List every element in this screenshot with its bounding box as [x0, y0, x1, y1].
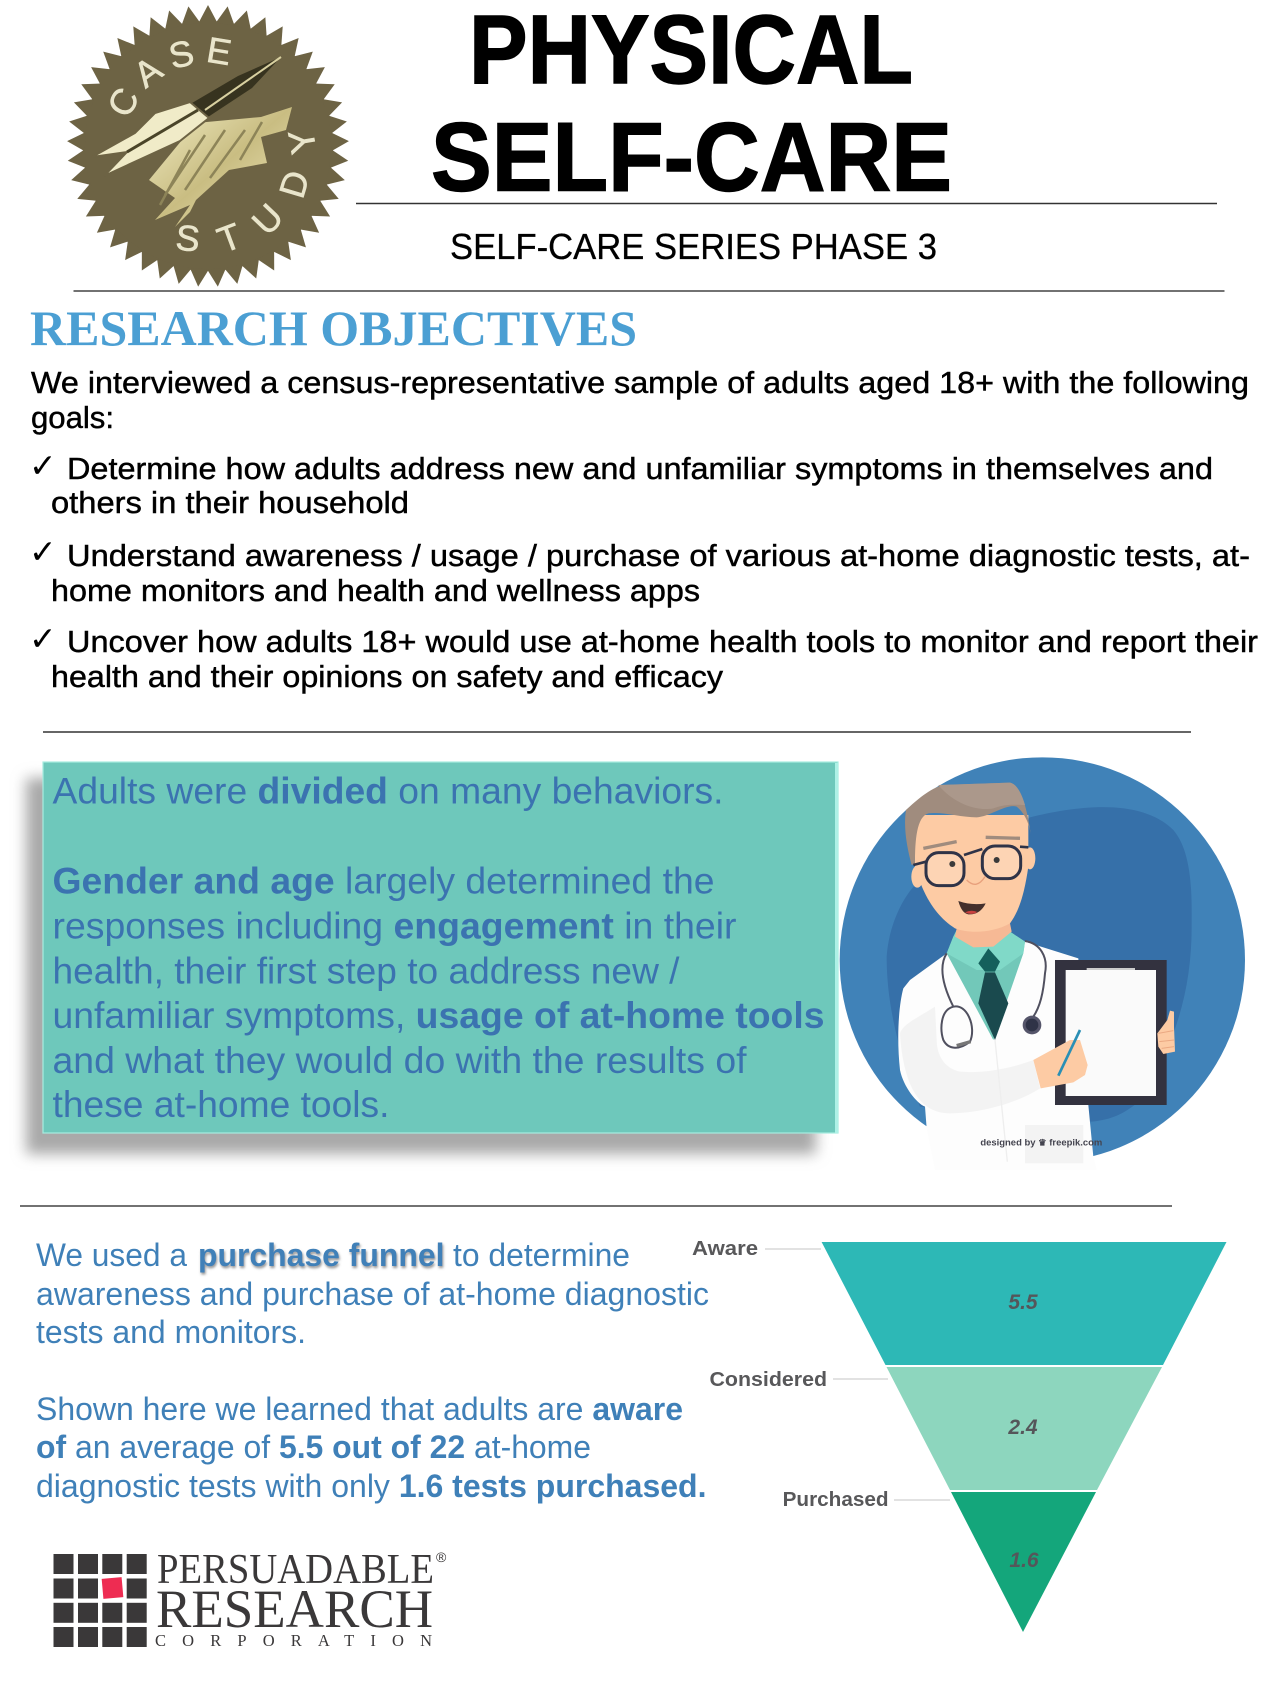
- funnel band: purchased: 1.6: [1009, 1549, 1039, 1572]
- funnel label: aware: Aware: [692, 1238, 758, 1260]
- text block: funnel finding: [36, 1391, 706, 1504]
- title: SELF-CARE: [431, 103, 952, 212]
- key finding text: unfamiliar symptoms, usage of at-home tools: [52, 995, 824, 1036]
- funnel label: aware: [692, 1238, 821, 1260]
- key finding text: responses including engagement in their: [52, 906, 736, 946]
- key finding text: and what they would do with the results of: [52, 1040, 747, 1081]
- title: [431, 0, 952, 212]
- funnel label: purchased: Purchased: [783, 1489, 889, 1511]
- text block: research objectives intro: [31, 365, 1249, 435]
- icon: doctor illustration: [840, 757, 1245, 1170]
- objective 2: Understand awareness / usage / purchase of various at-home diagnostic tests, at-: [67, 538, 1250, 573]
- objective 3: health and their opinions on safety and efficacy: [51, 659, 724, 694]
- key finding text: Gender and age largely determined the: [52, 860, 714, 902]
- logo: persuadable research: RESEARCH: [156, 1579, 433, 1639]
- objective 3: ✓: [29, 619, 57, 658]
- panel: key finding: [26, 762, 838, 1154]
- key finding text: these at-home tools.: [52, 1084, 389, 1125]
- objective 1: others in their household: [51, 485, 409, 520]
- text block: funnel finding: of an average of 5.5 out of 22 at-home: [36, 1429, 591, 1465]
- logo: persuadable research: ®: [436, 1549, 447, 1565]
- subtitle: SELF-CARE SERIES PHASE 3: [450, 226, 937, 267]
- objective 2: [29, 532, 1250, 608]
- objective 1: ✓: [29, 446, 57, 485]
- objective 1: [29, 446, 1213, 520]
- funnel chart: [692, 1238, 1226, 1632]
- key finding text: health, their first step to address new /: [52, 950, 680, 992]
- funnel band: considered: [886, 1367, 1162, 1490]
- text block: purchase funnel intro: awareness and purchase of at-home diagnostic: [36, 1276, 709, 1312]
- text block: purchase funnel intro: to determine: [453, 1237, 630, 1273]
- text block: purchase funnel intro: purchase funnel: [198, 1237, 444, 1273]
- objective 2: home monitors and health and wellness apps: [51, 573, 700, 608]
- seal text: case: CASE: [110, 37, 231, 114]
- objective 2: ✓: [29, 532, 57, 571]
- logo: persuadable research: CORPORATION: [155, 1631, 432, 1650]
- text block: purchase funnel intro: tests and monitors.: [36, 1314, 306, 1350]
- logo: persuadable research: PERSUADABLE: [157, 1547, 434, 1593]
- icon: case study seal: [67, 5, 349, 286]
- text block: funnel finding: diagnostic tests with only 1.6 tests purchased.: [36, 1468, 706, 1504]
- heading: research objectives: RESEARCH OBJECTIVES: [30, 300, 637, 356]
- freepik credit: designed by ♛ freepik.com: [980, 1137, 1102, 1147]
- objective 1: Determine how adults address new and unfamiliar symptoms in themselves and: [67, 451, 1213, 486]
- objective 3: [29, 619, 1258, 694]
- funnel label: considered: Considered: [710, 1369, 827, 1391]
- funnel band: considered: 2.4: [1007, 1416, 1038, 1439]
- key finding text: [52, 770, 824, 1125]
- objective 3: Uncover how adults 18+ would use at-home health tools to monitor and report their: [67, 624, 1258, 659]
- text block: research objectives intro: goals:: [31, 400, 114, 435]
- seal text: study: STUDY: [176, 132, 316, 252]
- text block: research objectives intro: We interviewed a census-representative sample of adults aged 18+ with the following: [31, 365, 1249, 400]
- key finding text: Adults were divided on many behaviors.: [52, 770, 724, 812]
- funnel band: aware: 5.5: [1008, 1291, 1038, 1314]
- text block: purchase funnel intro: [36, 1237, 709, 1350]
- funnel band: aware: [822, 1242, 1226, 1365]
- text block: funnel finding: Shown here we learned that adults are aware: [36, 1391, 683, 1427]
- text block: purchase funnel intro: We used a: [36, 1237, 187, 1273]
- logo: persuadable research: [54, 1547, 447, 1650]
- funnel band: purchased: [951, 1492, 1096, 1632]
